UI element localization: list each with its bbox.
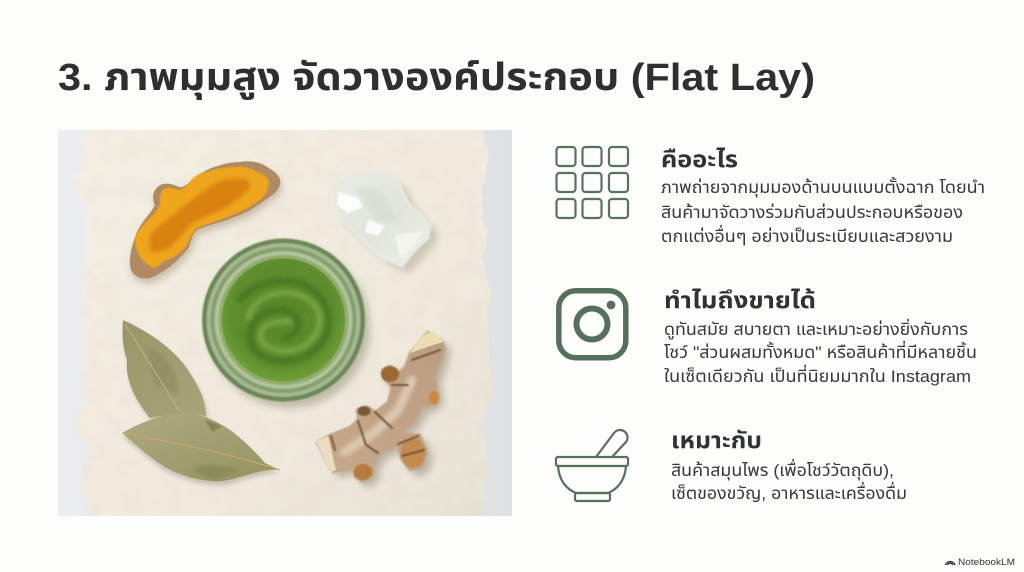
icon: grid — [556, 147, 628, 218]
text block: why it sells: ดูทันสมัย สบายตา และเหมาะอย่างยิ่งกับการ — [664, 318, 968, 341]
icon: instagram — [559, 291, 626, 358]
icon: mortar and pestle — [556, 430, 628, 501]
heading: what it is: คืออะไร — [661, 146, 738, 172]
heading: why it sells: ทำไมถึงขายได้ — [664, 287, 816, 313]
heading: suitable for: เหมาะกับ — [671, 427, 762, 453]
turmeric slice — [130, 161, 282, 284]
text block: why it sells: ในเซ็ตเดียวกัน เป็นที่นิยมมากใน Instagram — [664, 364, 971, 386]
text block: suitable for: เซ็ตของขวัญ, อาหารและเครื่องดื่ม — [671, 481, 907, 503]
text block: why it sells — [664, 318, 977, 386]
handmade paper sheet — [73, 120, 493, 526]
turmeric root — [316, 331, 451, 488]
title: 3. ภาพมุมสูง จัดวางองค์ประกอบ (Flat Lay) — [58, 57, 815, 100]
text block: what it is: ภาพถ่ายจากมุมมองด้านบนแบบตั้งฉาก โดยนำ — [661, 176, 985, 198]
text block: what it is: สินค้ามาจัดวางร่วมกับส่วนประกอบหรือของ — [661, 202, 963, 222]
text block: what it is: ตกแต่งอื่นๆ อย่างเป็นระเบียบและสวยงาม — [661, 224, 953, 246]
bay leaf lower — [122, 413, 281, 485]
bay leaf upper — [122, 320, 208, 422]
glass jar with green paste — [202, 238, 370, 408]
section: suitable for — [556, 427, 907, 503]
section: what it is — [556, 146, 985, 246]
text block: suitable for — [671, 458, 907, 503]
text block: why it sells: โชว์ "ส่วนผสมทั้งหมด" หรือสินค้าที่มีหลายชิ้น — [664, 340, 977, 362]
panel: flat lay photo — [58, 120, 512, 526]
section: why it sells — [559, 287, 977, 386]
logo: NotebookLM: NotebookLM — [958, 557, 1015, 568]
text block: suitable for: สินค้าสมุนไพร (เพื่อโชว์วัตถุดิบ), — [671, 458, 894, 481]
green paste — [222, 258, 345, 382]
salt crystal — [335, 172, 438, 273]
text block: what it is — [661, 176, 985, 246]
